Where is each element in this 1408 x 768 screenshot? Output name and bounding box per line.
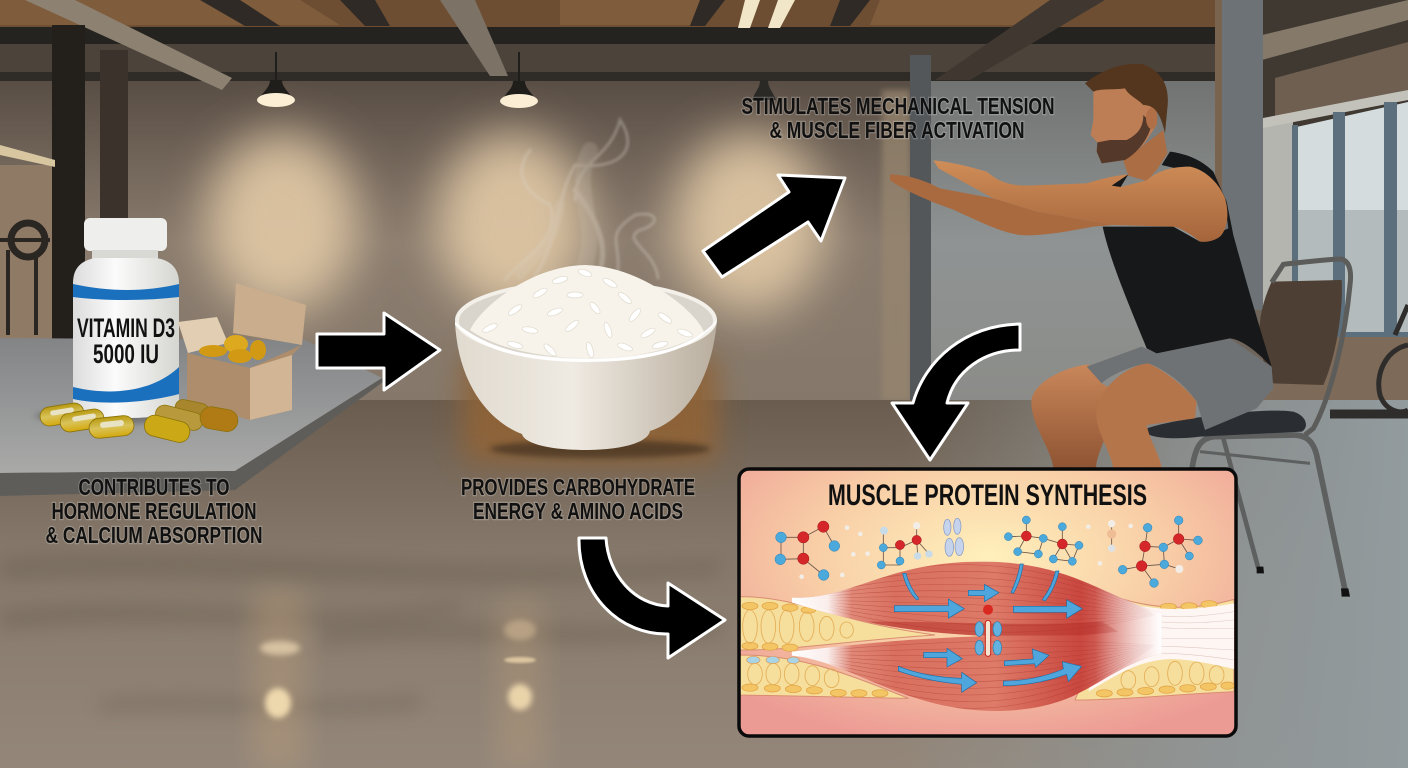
label: hormone regulation	[46, 474, 262, 548]
floor	[0, 400, 1408, 768]
floor ripples	[0, 554, 720, 713]
lamps	[257, 52, 776, 108]
tendon	[1088, 598, 1234, 692]
molecules	[781, 520, 1198, 583]
panel title: MUSCLE PROTEIN SYNTHESIS	[828, 479, 1147, 512]
lower arm	[890, 174, 1113, 235]
ear	[1146, 108, 1157, 129]
label: hormone regulation: HORMONE REGULATION	[52, 498, 256, 524]
back wall	[0, 75, 930, 410]
face	[1091, 75, 1157, 163]
near leg	[1096, 363, 1197, 468]
columns	[1215, 0, 1225, 310]
arrow: vitamin to rice	[317, 313, 440, 390]
upper muscle	[792, 558, 1162, 638]
arrow: rice to synthesis	[579, 538, 725, 658]
bottle label: VITAMIN D3	[77, 313, 175, 343]
wall light pools	[206, 132, 826, 312]
bowl body	[455, 320, 717, 450]
right room	[1262, 0, 1408, 400]
man and chair	[890, 64, 1351, 597]
chromosome and red dot	[975, 605, 1002, 656]
label: stimulates tension: & MUSCLE FIBER ACTIVATION	[770, 117, 1024, 143]
gym bike	[1330, 305, 1408, 414]
panel: muscle protein synthesis	[739, 469, 1236, 736]
vitamin bottle	[35, 218, 185, 424]
label: carbohydrate energy	[461, 474, 695, 524]
far leg	[1031, 364, 1110, 468]
beard	[1097, 115, 1152, 163]
upper arm and shoulder	[933, 160, 1227, 242]
bottle body	[73, 258, 179, 418]
rice bowl	[455, 265, 717, 458]
chair feet	[1257, 567, 1350, 597]
neck	[1123, 130, 1167, 181]
fat tissue	[740, 597, 1234, 700]
windows	[1292, 102, 1408, 337]
label: hormone regulation: CONTRIBUTES TO	[78, 474, 230, 500]
arrow: rice to exercise	[703, 175, 845, 277]
bottle label	[77, 313, 175, 369]
panel border	[739, 469, 1236, 736]
ceiling	[0, 0, 1408, 30]
bottle cap	[84, 218, 167, 251]
label: carbohydrate energy: ENERGY & AMINO ACIDS	[473, 498, 683, 524]
blue flow arrows	[894, 564, 1082, 692]
rice grains	[481, 268, 694, 359]
tank strap	[1112, 174, 1128, 187]
lower muscle	[792, 633, 1162, 713]
chair frame	[1192, 435, 1345, 590]
steam	[505, 120, 658, 280]
chromosome pair	[944, 518, 964, 556]
label: stimulates tension	[742, 93, 1054, 143]
chair seat	[1143, 411, 1306, 438]
gym equipment silhouette	[0, 223, 50, 335]
floor reflections	[254, 590, 542, 768]
muscle illustration	[740, 516, 1234, 713]
label: carbohydrate energy: PROVIDES CARBOHYDRATE	[461, 474, 695, 500]
loose capsules	[39, 398, 240, 445]
rice	[470, 265, 704, 358]
arrow: exercise to synthesis	[892, 324, 1020, 460]
wooden surface under bowl	[462, 355, 718, 463]
hair	[1085, 64, 1168, 133]
bottle label: 5000 IU	[93, 339, 159, 369]
chair back	[1259, 259, 1351, 435]
tank top	[1103, 152, 1272, 367]
table	[0, 338, 383, 496]
label: hormone regulation: & CALCIUM ABSORPTION	[46, 522, 262, 548]
label: stimulates tension: STIMULATES MECHANICAL TENSION	[742, 93, 1054, 119]
shorts	[1087, 338, 1273, 430]
cardboard box with capsules	[178, 283, 306, 420]
